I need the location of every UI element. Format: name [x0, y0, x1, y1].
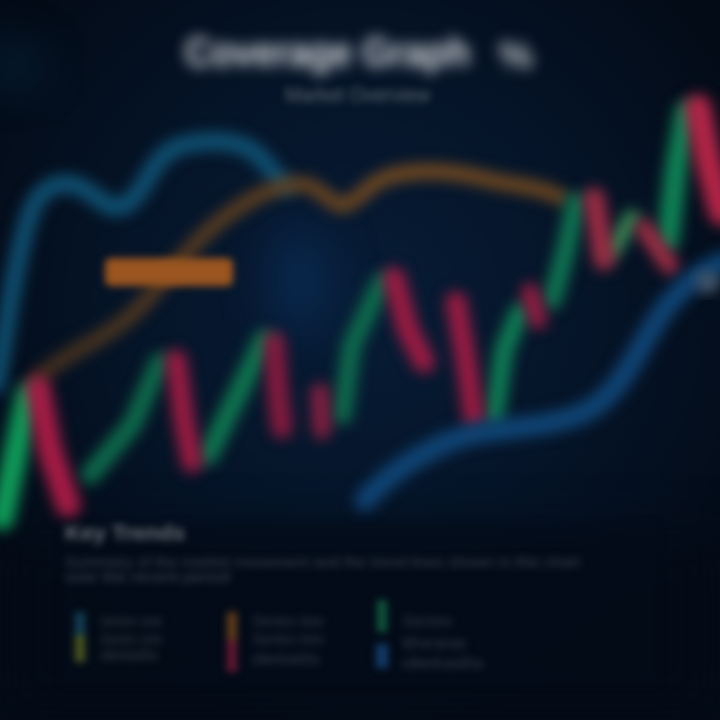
legend item one: Series one: [100, 613, 162, 630]
panel: legend: [62, 522, 658, 684]
orange highlight label: [105, 258, 233, 286]
candlesticks: green rising segments: [2, 112, 686, 518]
legend item one: Series one: [100, 631, 162, 648]
legend item three: Series: [402, 613, 452, 630]
line: orange trend: [38, 171, 562, 378]
legend heading: Key Trends: [65, 522, 185, 545]
line: upper blue trend: [0, 141, 285, 385]
legend item three: three: [402, 635, 467, 652]
legend item two: [232, 612, 324, 672]
background glow accents: [0, 39, 338, 335]
legend item one: details: [100, 647, 158, 664]
subtitle: Market Overview: [285, 84, 431, 107]
candlesticks: red falling segments: [38, 108, 720, 505]
marker: right edge highlight: [696, 271, 720, 293]
legend item two: details: [252, 651, 320, 668]
title: Coverage Graph: [185, 29, 470, 75]
legend item two: Series two: [252, 613, 324, 630]
title: %: [499, 35, 533, 77]
legend item three: [382, 600, 484, 672]
legend item two: Series two: [252, 631, 324, 648]
legend description: over the recent period: [65, 569, 230, 586]
legend description: [65, 554, 581, 586]
line: lower blue trend: [365, 262, 720, 500]
legend description: Summary of the market movement and the trend lines shown in this chart: [65, 554, 581, 571]
legend background: [62, 524, 658, 684]
legend item three: details: [402, 655, 484, 672]
legend item one: [80, 612, 162, 664]
